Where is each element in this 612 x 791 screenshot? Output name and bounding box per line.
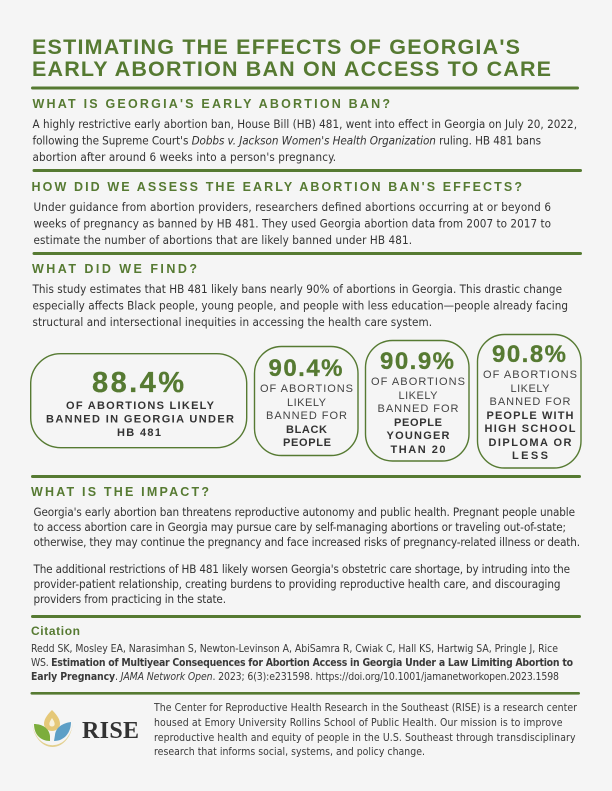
text block: method: Under guidance from abortion providers, researchers defined abortions occurring at or beyond 6 bbox=[34, 200, 551, 214]
stat card: Black people 90.4%: PEOPLE bbox=[283, 437, 331, 449]
text block: ban description: abortion after around 6 weeks into a person's pregnancy. bbox=[32, 150, 336, 164]
stat card: high school or less 90.8%: PEOPLE WITH bbox=[486, 410, 574, 422]
icon: ring bbox=[32, 720, 73, 747]
text block: impact paragraph 1: Georgia's early abortion ban threatens reproductive autonomy and public health. Pregnant people unable bbox=[34, 505, 575, 519]
stat card: high school or less 90.8%: DIPLOMA OR bbox=[488, 437, 572, 449]
stat card: people younger than 20 90.9% bbox=[366, 340, 469, 461]
text block: citation reference: Redd SK, Mosley EA, Narasimhan S, Newton-Levinson A, AbiSamra R, Cwiak C, Hall KS, Hartwig SA, Pringle J, Rice bbox=[31, 643, 558, 655]
text block: ban description: A highly restrictive early abortion ban, House Bill (HB) 481, went into effect in Georgia on July 20, 2022, bbox=[32, 117, 577, 131]
stat card: high school or less 90.8%: LESS bbox=[512, 450, 548, 462]
text block: impact paragraph 2 bbox=[32, 562, 570, 606]
panel: what did we find bbox=[32, 262, 568, 329]
text block: findings: especially affects Black people, young people, and people with less education—people already facing bbox=[32, 298, 568, 312]
icon: flame core bbox=[49, 718, 55, 726]
text block: impact paragraph 1: to access abortion care in Georgia may pursue care by self-managing abortions or traveling out-of-state; bbox=[34, 520, 566, 534]
stat card: overall 88.4%: BANNED IN GEORGIA UNDER bbox=[46, 414, 234, 426]
heading: what did we find: WHAT DID WE FIND? bbox=[32, 262, 197, 276]
stat card: people younger than 20 90.9%: 90.9% bbox=[380, 348, 454, 375]
heading: citation: Citation bbox=[31, 624, 80, 638]
stat card: high school or less 90.8%: OF ABORTIONS bbox=[483, 369, 577, 381]
title: EARLY ABORTION BAN ON ACCESS TO CARE bbox=[32, 57, 551, 81]
logo: RISE bbox=[32, 710, 139, 747]
text block: findings bbox=[32, 282, 568, 329]
text block: about RISE: housed at Emory University Rollins School of Public Health. Our mission is to improve bbox=[154, 717, 563, 729]
text block: impact paragraph 2: providers from practicing in the state. bbox=[34, 592, 226, 606]
heading: how did we assess: HOW DID WE ASSESS THE EARLY ABORTION BAN'S EFFECTS? bbox=[32, 180, 522, 194]
stat card: overall 88.4%: OF ABORTIONS LIKELY bbox=[66, 400, 215, 412]
stat card: high school or less 90.8%: HIGH SCHOOL bbox=[484, 423, 576, 435]
text block: about RISE: reproductive health and equity of people in the U.S. Southeast through transdisciplinary bbox=[154, 732, 576, 744]
panel: how did we assess bbox=[32, 180, 551, 247]
stat card: high school or less 90.8%: LIKELY bbox=[510, 383, 550, 395]
heading: what is the ban: WHAT IS GEORGIA'S EARLY ABORTION BAN? bbox=[32, 97, 390, 111]
wordmark: RISE bbox=[82, 718, 139, 744]
stat card: Black people 90.4%: BANNED FOR bbox=[266, 410, 347, 422]
stat card: overall 88.4%: 88.4% bbox=[92, 367, 184, 399]
text block: citation reference bbox=[31, 643, 574, 683]
text block: about RISE: research that informs social, systems, and policy change. bbox=[154, 746, 425, 758]
stat card: people younger than 20 90.9%: LIKELY bbox=[398, 390, 438, 402]
text block: ban description bbox=[32, 117, 577, 164]
icon: flame bbox=[44, 710, 60, 731]
text block: impact paragraph 2: The additional restrictions of HB 481 likely worsen Georgia's obstetric care shortage, by intruding into the bbox=[32, 562, 570, 576]
panel: what is the ban bbox=[32, 97, 577, 164]
text block: impact paragraph 2: provider-patient relationship, creating burdens to providing reproductive health care, and discouraging bbox=[34, 577, 560, 591]
stat card: high school or less 90.8% bbox=[478, 334, 581, 468]
panel: citation bbox=[31, 624, 574, 683]
stat card: Black people 90.4% bbox=[254, 346, 358, 456]
text block: citation reference: WS. Estimation of Multiyear Consequences for Abortion Access in Georgia Under a Law Limiting Abortion to bbox=[31, 657, 574, 669]
stat card: people younger than 20 90.9%: YOUNGER bbox=[386, 430, 450, 442]
stat card: people younger than 20 90.9%: THAN 20 bbox=[390, 444, 446, 456]
text block: about RISE: The Center for Reproductive Health Research in the Southeast (RISE) is a research center bbox=[153, 702, 577, 714]
stat card: Black people 90.4%: BLACK bbox=[286, 424, 327, 436]
text block: impact paragraph 1: otherwise, they may continue the pregnancy and face increased risks of pregnancy-related illness or death. bbox=[34, 535, 580, 549]
panel: what is the impact bbox=[31, 485, 580, 606]
stat card: high school or less 90.8%: 90.8% bbox=[492, 341, 566, 368]
text block: findings: This study estimates that HB 481 likely bans nearly 90% of abortions in Georgia. This drastic change bbox=[32, 282, 562, 296]
text block: method: weeks of pregnancy as banned by HB 481. They used Georgia abortion data from 2007 to 2017 to bbox=[34, 216, 551, 230]
stat card: people younger than 20 90.9%: OF ABORTIONS bbox=[371, 376, 465, 388]
stat card: high school or less 90.8%: BANNED FOR bbox=[490, 396, 571, 408]
stat card: overall 88.4%: HB 481 bbox=[117, 427, 161, 439]
text block: findings: structural and intersectional inequities in accessing the health care system. bbox=[32, 315, 432, 329]
text block: ban description: following the Supreme Court's Dobbs v. Jackson Women's Health Organization ruling. HB 481 bans bbox=[32, 134, 541, 148]
stat card: Black people 90.4%: 90.4% bbox=[268, 355, 342, 382]
stat card: Black people 90.4%: OF ABORTIONS bbox=[260, 383, 353, 395]
heading: what is the impact: WHAT IS THE IMPACT? bbox=[31, 485, 209, 499]
stat card: people younger than 20 90.9%: BANNED FOR bbox=[378, 403, 459, 415]
text block: method bbox=[34, 200, 551, 247]
stat card: people younger than 20 90.9%: PEOPLE bbox=[394, 417, 442, 429]
icon: green leaf bbox=[34, 724, 50, 741]
text block: impact paragraph 1 bbox=[34, 505, 580, 549]
title: ESTIMATING THE EFFECTS OF GEORGIA'S bbox=[32, 35, 520, 59]
text block: citation reference: Early Pregnancy. JAMA Network Open. 2023; 6(3):e231598. https://doi.org/10.1001/jamanetworkopen.2023.1598 bbox=[31, 671, 559, 683]
icon: blue leaf bbox=[54, 722, 71, 741]
text block: about RISE bbox=[153, 702, 577, 758]
stat card: Black people 90.4%: LIKELY bbox=[287, 397, 327, 409]
text block: method: estimate the number of abortions that are likely banned under HB 481. bbox=[34, 233, 412, 247]
stat card: overall 88.4% bbox=[31, 354, 247, 448]
title bbox=[32, 35, 551, 81]
